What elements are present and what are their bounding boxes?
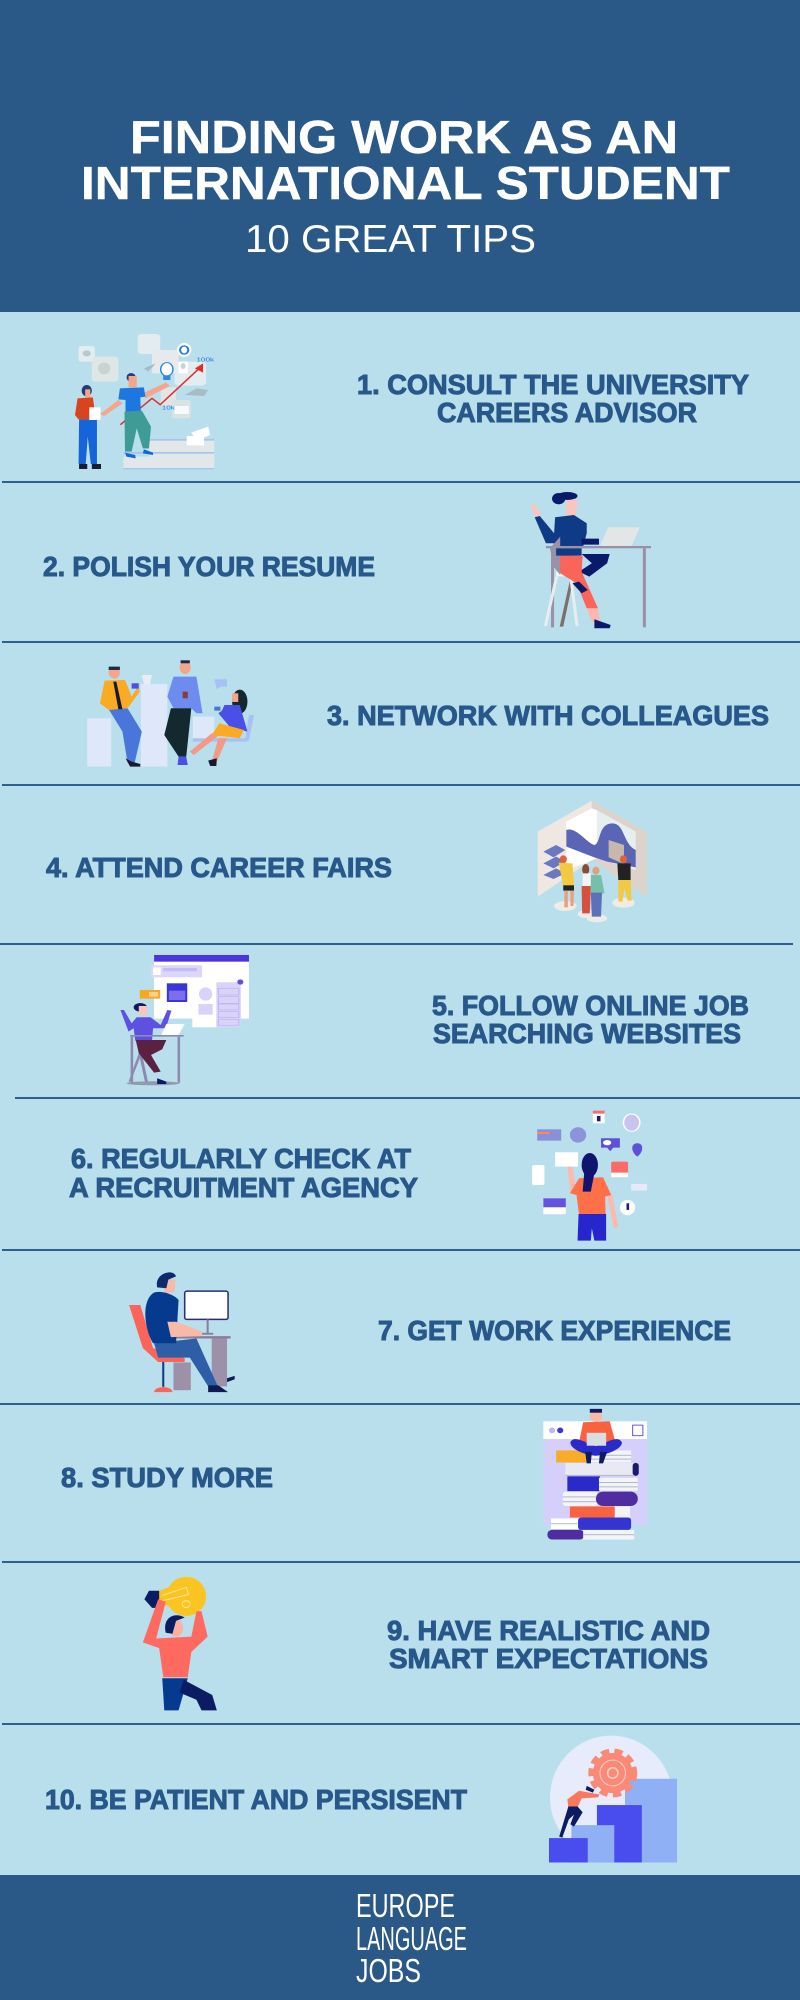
header band xyxy=(0,0,800,312)
illustration: person on stack of books xyxy=(543,1409,647,1539)
woman seen from behind xyxy=(567,1153,618,1241)
tip 6 text: A RECRUITMENT AGENCY xyxy=(69,1172,418,1203)
tip 5 text: SEARCHING WEBSITES xyxy=(433,1018,741,1049)
tip 8 text: 8. STUDY MORE xyxy=(61,1462,273,1493)
tip 9 text: SMART EXPECTATIONS xyxy=(389,1643,708,1674)
woman at desk xyxy=(120,1003,185,1085)
tip 5 text xyxy=(432,990,749,1049)
seated person xyxy=(570,1409,622,1463)
title xyxy=(81,111,730,209)
tip 9 text xyxy=(387,1615,710,1674)
illustration: man at computer xyxy=(129,1272,235,1392)
tip 3 text: 3. NETWORK WITH COLLEAGUES xyxy=(327,700,769,731)
footer band xyxy=(0,1875,800,2000)
fair visitors xyxy=(559,855,632,917)
tip 6 text xyxy=(69,1143,418,1203)
man in yellow xyxy=(100,667,142,767)
illustration: woman at laptop xyxy=(531,492,651,628)
tip 5 text: 5. FOLLOW ONLINE JOB xyxy=(432,990,749,1021)
tip 1 text: CAREERS ADVISOR xyxy=(437,397,697,428)
subtitle: 10 GREAT TIPS xyxy=(245,218,536,261)
woman seated xyxy=(190,690,247,766)
logo: Europe Language Jobs xyxy=(356,1887,467,1989)
illustration: team with growth chart: 10k xyxy=(162,405,176,411)
logo: Europe Language Jobs: JOBS xyxy=(356,1952,421,1989)
tip 7 text: 7. GET WORK EXPERIENCE xyxy=(378,1315,731,1346)
illustration: team with growth chart xyxy=(75,334,215,469)
book stack xyxy=(547,1450,639,1539)
gear xyxy=(591,1751,634,1795)
illustration: team with growth chart: 100k xyxy=(196,357,215,363)
logo: Europe Language Jobs: EUROPE xyxy=(356,1887,455,1924)
illustration: person lifting a light bulb xyxy=(143,1577,217,1710)
tip 4 text: 4. ATTEND CAREER FAIRS xyxy=(46,852,392,883)
illustration: career fair booth xyxy=(538,801,647,922)
logo: Europe Language Jobs: LANGUAGE xyxy=(356,1920,467,1957)
climbing figure xyxy=(559,1786,599,1838)
illustration: colleagues networking xyxy=(87,660,254,767)
title: INTERNATIONAL STUDENT xyxy=(81,157,730,209)
illustration: climbing steps with gear xyxy=(549,1736,677,1862)
illustration: online job website xyxy=(120,955,249,1085)
tip 1 text xyxy=(357,369,749,428)
tip 2 text: 2. POLISH YOUR RESUME xyxy=(43,551,375,582)
illustration: woman surrounded by app icons xyxy=(532,1111,647,1241)
tip 1 text: 1. CONSULT THE UNIVERSITY xyxy=(357,369,749,400)
tip 6 text: 6. REGULARLY CHECK AT xyxy=(71,1143,411,1174)
title: FINDING WORK AS AN xyxy=(130,111,678,163)
woman xyxy=(75,385,101,469)
tip 10 text: 10. BE PATIENT AND PERSISENT xyxy=(45,1784,467,1815)
growth arrow xyxy=(120,363,203,425)
man xyxy=(100,373,170,458)
man in blue xyxy=(164,660,203,765)
tip 9 text: 9. HAVE REALISTIC AND xyxy=(387,1615,710,1646)
